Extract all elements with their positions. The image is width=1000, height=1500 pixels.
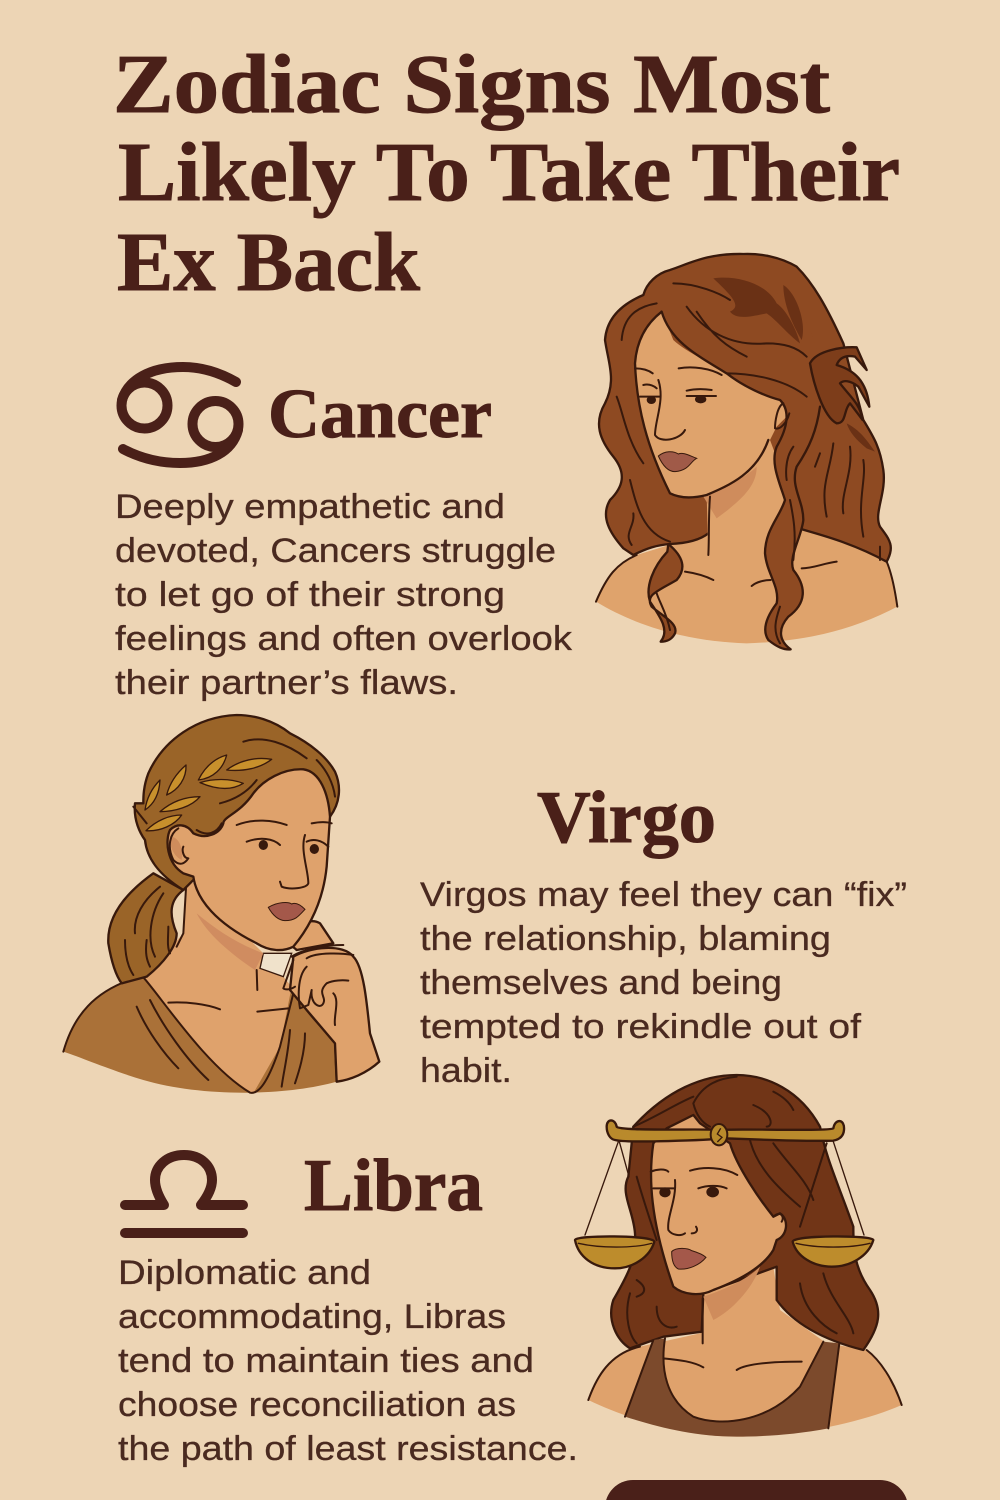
text: Libra description: choose reconciliation as <box>118 1386 516 1424</box>
panel: Libra <box>118 1075 908 1500</box>
claw-like hair clip <box>810 347 869 423</box>
eyes, nose, mouth <box>635 367 837 586</box>
scales <box>585 1142 864 1235</box>
panel: Cancer <box>115 254 897 702</box>
face <box>168 769 330 950</box>
scale pans <box>575 1236 654 1268</box>
hair lines <box>617 283 880 643</box>
text: Cancer description: devoted, Cancers struggle <box>115 532 556 570</box>
text: Cancer description: to let go of their strong <box>115 576 505 614</box>
panel: Virgo <box>63 715 907 1093</box>
title: Likely To Take Their <box>118 126 900 219</box>
heading: Virgo: Virgo <box>537 777 716 859</box>
face and neck <box>635 312 793 557</box>
front hair strands <box>662 278 821 649</box>
laurel leaves <box>145 755 272 831</box>
text: Virgo description <box>420 876 907 1090</box>
text: Virgo description: themselves and being <box>420 964 782 1002</box>
text: Libra description: accommodating, Libras <box>118 1298 506 1336</box>
heading: Libra: Libra <box>304 1145 483 1227</box>
text: Cancer description: their partner’s flaws. <box>115 664 458 702</box>
hair lines <box>627 1077 853 1343</box>
text: Libra description: the path of least resistance. <box>118 1430 578 1468</box>
title: Zodiac Signs Most <box>113 38 830 131</box>
text: Virgo description: tempted to rekindle out of <box>420 1008 862 1046</box>
text: Virgo description: habit. <box>420 1052 512 1090</box>
title: Ex Back <box>117 216 420 309</box>
dark footer tab <box>605 1480 908 1500</box>
text: Virgo description: Virgos may feel they can “fix” <box>420 876 907 914</box>
top <box>625 1338 839 1437</box>
text: Cancer description <box>115 488 573 702</box>
hand <box>290 948 379 1082</box>
head hair <box>135 715 339 890</box>
title <box>113 38 900 309</box>
icon: Cancer glyph <box>122 367 238 463</box>
heading: Cancer: Cancer <box>268 376 492 453</box>
text: Virgo description: the relationship, blaming <box>420 920 831 958</box>
text: Cancer description: feelings and often overlook <box>115 620 573 658</box>
facial features <box>651 1168 737 1235</box>
illustration: Cancer woman <box>596 254 897 649</box>
text: Libra description <box>118 1254 578 1468</box>
text: Libra description: Diplomatic and <box>118 1254 371 1292</box>
illustration: Libra woman with scales <box>575 1075 902 1437</box>
text: Libra description: tend to maintain ties and <box>118 1342 534 1380</box>
hair <box>611 1075 878 1350</box>
icon: Libra glyph <box>125 1155 243 1233</box>
face <box>651 1115 786 1294</box>
text: Cancer description: Deeply empathetic and <box>115 488 505 526</box>
illustration: Virgo woman <box>63 715 379 1093</box>
ponytail <box>108 873 183 983</box>
